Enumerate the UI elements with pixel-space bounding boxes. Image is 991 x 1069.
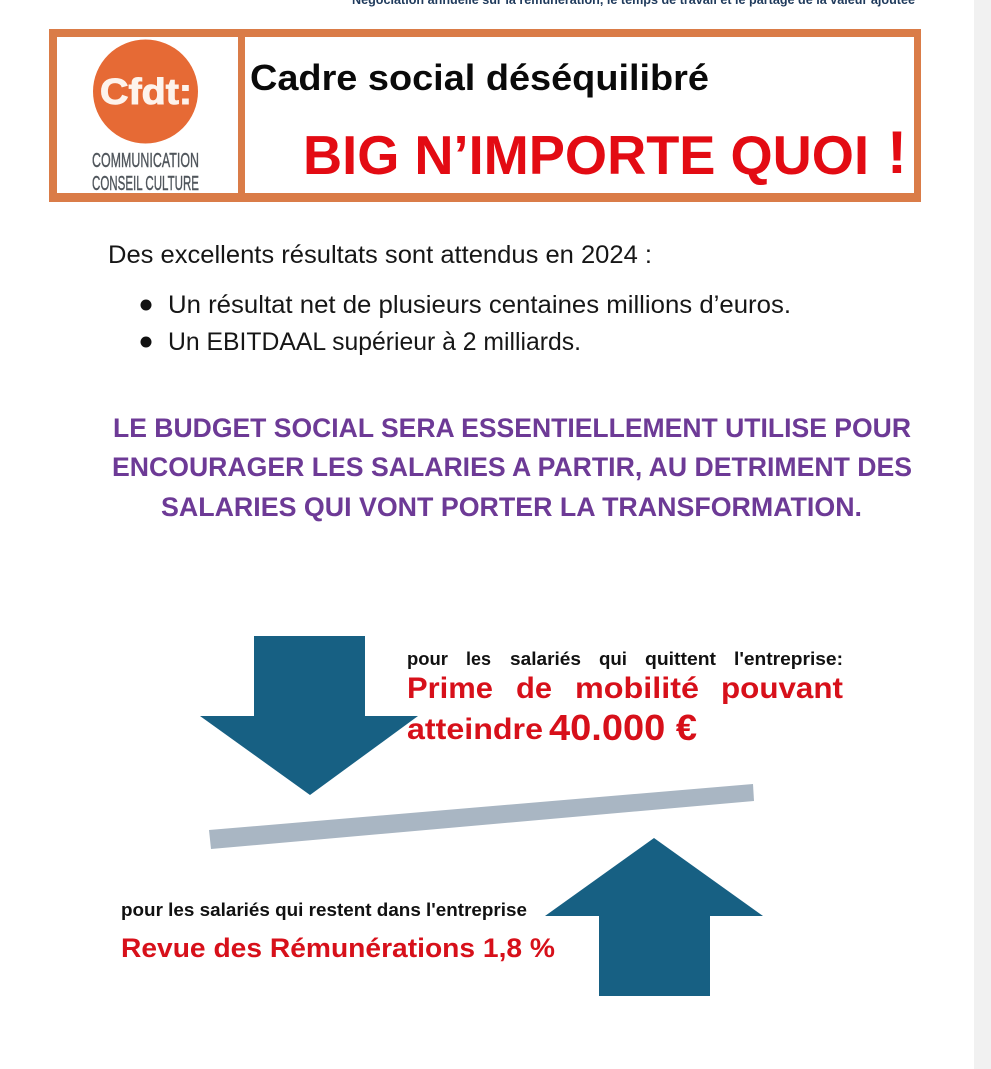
- purple statement: ENCOURAGER LES SALARIES A PARTIR, AU DETRIMENT DES: [112, 452, 912, 482]
- text: leaving employees: salariés: [510, 649, 581, 669]
- text: mobility bonus: atteindre: [407, 713, 543, 746]
- text: mobility bonus: de: [516, 672, 552, 705]
- logo caption: CONSEIL CULTURE: [92, 173, 199, 195]
- text: leaving employees: les: [466, 649, 491, 669]
- heading: cadre social: Cadre social déséquilibré: [250, 57, 709, 98]
- text: leaving employees: pour: [407, 649, 448, 669]
- text: mobility bonus: mobilité: [575, 672, 699, 705]
- text: mobility bonus: pouvant: [721, 672, 843, 705]
- heading: big n'importe quoi: BIG N’IMPORTE QUOI: [303, 124, 869, 186]
- purple statement: LE BUDGET SOCIAL SERA ESSENTIELLEMENT UTILISE POUR: [113, 413, 911, 443]
- logo caption: COMMUNICATION: [92, 150, 199, 172]
- text: leaving employees: l'entreprise:: [734, 649, 843, 669]
- text: leaving employees: [407, 649, 843, 669]
- scrollbar strip: [974, 0, 991, 1069]
- bullet list: [140, 291, 791, 356]
- text: salary review: Revue des Rémunérations 1,8 %: [121, 933, 555, 963]
- balance bar: [209, 784, 754, 849]
- text: mobility bonus: Prime: [407, 672, 493, 705]
- bullet list: Un EBITDAAL supérieur à 2 milliards.: [168, 328, 581, 356]
- intro text: Des excellents résultats sont attendus en 2024 :: [108, 241, 652, 269]
- text: leaving employees: qui: [599, 649, 627, 669]
- purple statement: [112, 413, 912, 522]
- text: leaving employees: quittent: [645, 649, 716, 669]
- text: mobility bonus: 40.000 €: [549, 707, 697, 748]
- bullet list: Un résultat net de plusieurs centaines millions d’euros.: [168, 291, 791, 319]
- arrow: up: [545, 838, 763, 996]
- logo cell: [57, 37, 238, 193]
- logo caption: [92, 150, 199, 195]
- heading: exclamation mark: !: [887, 119, 907, 186]
- logo: Cfdt circle: Cfdt:: [100, 71, 192, 112]
- header panel: [49, 29, 921, 202]
- purple statement: SALARIES QUI VONT PORTER LA TRANSFORMATION.: [161, 492, 862, 522]
- logo: Cfdt circle: [93, 40, 198, 144]
- text: mobility bonus: [407, 672, 843, 748]
- arrow: down: [200, 636, 418, 795]
- title cell: [245, 37, 914, 193]
- text: staying employees: pour les salariés qui restent dans l'entreprise: [121, 900, 527, 920]
